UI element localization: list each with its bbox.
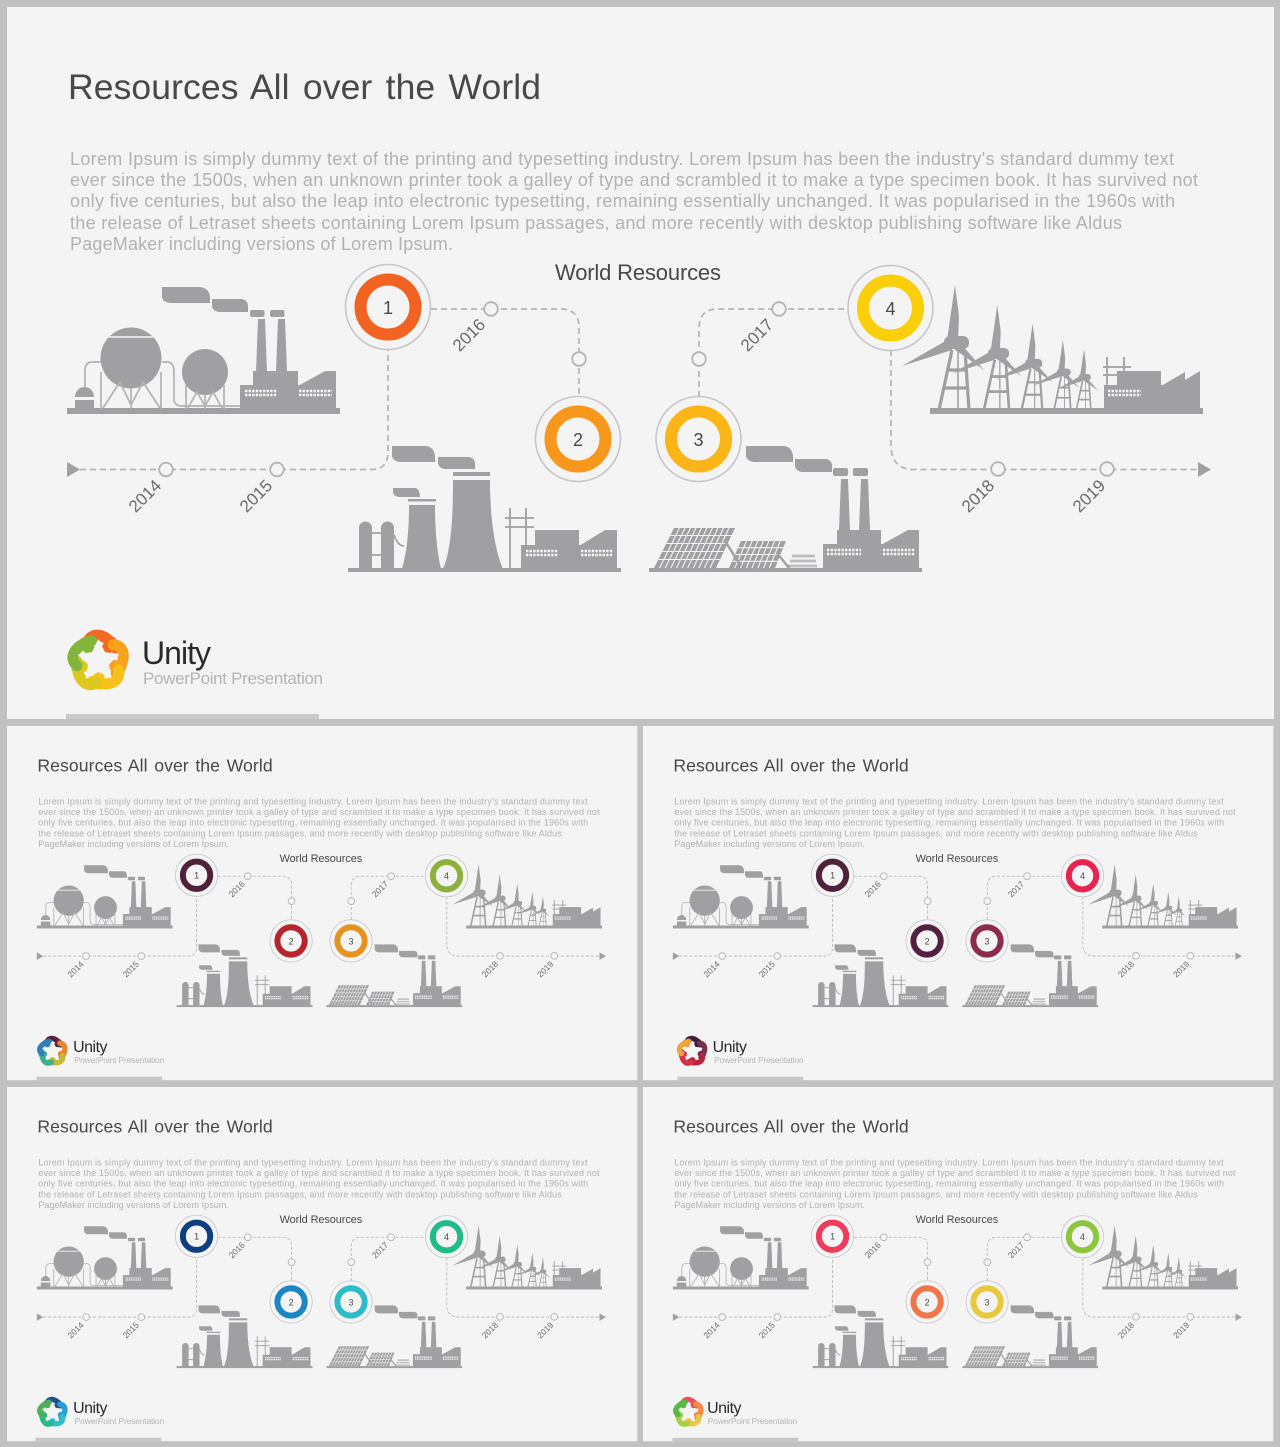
badge 2: 2 — [573, 430, 583, 450]
panel: variant slide 4 — [643, 1087, 1273, 1441]
year labels: 2019 — [535, 959, 556, 979]
year labels — [125, 315, 1109, 516]
year labels: 2017 — [1006, 879, 1026, 899]
year labels: 2016 — [227, 879, 247, 899]
badge 3: 3 — [985, 936, 990, 946]
badge 2: 2 — [289, 1297, 294, 1307]
body text — [674, 797, 1236, 849]
body text: the release of Letraset sheets containing Lorem Ipsum passages, and more recently with desktop publishing software like Aldus — [674, 1189, 1198, 1199]
icon: solar power plant — [645, 446, 922, 572]
panel: variant slide 2 — [643, 726, 1273, 1080]
title: Resources All over the World — [37, 1116, 273, 1136]
badge 1 — [811, 1215, 854, 1257]
badge 2 — [270, 920, 312, 962]
year labels: 2018 — [1116, 959, 1136, 979]
year labels: 2014 — [701, 959, 722, 979]
timeline — [67, 302, 1211, 477]
chart heading: World Resources — [916, 853, 999, 865]
year labels: 2018 — [1116, 1320, 1136, 1340]
logo icon — [674, 1399, 703, 1428]
chart heading: World Resources — [916, 1214, 999, 1226]
badge 4: 4 — [1080, 871, 1085, 881]
timeline — [673, 1234, 1242, 1321]
year labels: 2018 — [480, 959, 500, 979]
logo text — [142, 635, 323, 688]
logo text — [73, 1400, 165, 1426]
badge 2: 2 — [289, 936, 294, 946]
icon: wind farm — [902, 285, 1203, 414]
year labels: 2015 — [121, 959, 141, 979]
badge 3: 3 — [349, 1297, 354, 1307]
badge 2 — [906, 1281, 948, 1323]
year labels: 2018 — [480, 1320, 500, 1340]
year labels: 2014 — [65, 1320, 86, 1340]
logo text: PowerPoint Presentation — [75, 1055, 165, 1065]
badge 4 — [425, 855, 468, 897]
badge 4: 4 — [444, 871, 449, 881]
badge 4 — [425, 1216, 468, 1258]
chart heading: World Resources — [280, 1214, 363, 1226]
year labels: 2014 — [125, 476, 165, 516]
year labels: 2019 — [1171, 1320, 1192, 1340]
logo text: PowerPoint Presentation — [75, 1416, 165, 1426]
year labels — [701, 879, 1192, 979]
body text: only five centuries, but also the leap into electronic typesetting, remaining essentially unchanged. It was popularised in the 1960s with — [38, 818, 588, 828]
badge 1: 1 — [194, 1232, 199, 1242]
badge 2: 2 — [925, 1297, 930, 1307]
title: Resources All over the World — [37, 755, 273, 775]
year labels: 2015 — [121, 1320, 141, 1340]
factory icons — [673, 864, 1238, 1007]
year labels: 2014 — [701, 1320, 722, 1340]
body text: PageMaker including versions of Lorem Ipsum. — [70, 234, 453, 254]
badge 3: 3 — [693, 430, 704, 450]
badge 4: 4 — [1080, 1232, 1085, 1242]
title: Resources All over the World — [68, 67, 541, 107]
logo icon — [38, 1038, 67, 1067]
badge 4: 4 — [885, 299, 896, 319]
logo text — [713, 1039, 804, 1065]
icon: nuclear power plant — [348, 446, 621, 572]
body text — [38, 797, 600, 849]
body text: ever since the 1500s, when an unknown printer took a galley of type and scrambled it to make a type specimen book. It has survived not — [674, 1168, 1236, 1178]
body text — [70, 149, 1198, 254]
year labels: 2016 — [863, 1240, 883, 1260]
year labels: 2019 — [1171, 959, 1192, 979]
badge 1: 1 — [383, 298, 393, 318]
logo text: PowerPoint Presentation — [143, 669, 323, 688]
logo text: Unity — [73, 1400, 108, 1417]
timeline — [37, 1234, 606, 1321]
badge 4 — [848, 266, 933, 350]
body text: PageMaker including versions of Lorem Ipsum. — [38, 1200, 229, 1210]
badge 1 — [175, 854, 218, 896]
logo text: Unity — [713, 1039, 747, 1056]
body text: PageMaker including versions of Lorem Ipsum. — [38, 839, 229, 849]
logo icon — [70, 635, 128, 692]
logo text: PowerPoint Presentation — [714, 1055, 804, 1065]
body text: Lorem Ipsum is simply dummy text of the printing and typesetting industry. Lorem Ipsum has been the industry's standard dummy text — [674, 797, 1224, 807]
footer bar — [677, 1077, 803, 1080]
body text — [38, 1158, 600, 1210]
year labels: 2016 — [863, 879, 883, 899]
badge 3 — [966, 1281, 1008, 1323]
badge 1: 1 — [194, 871, 199, 881]
body text: ever since the 1500s, when an unknown printer took a galley of type and scrambled it to make a type specimen book. It has survived not — [38, 1168, 600, 1178]
logo text: PowerPoint Presentation — [708, 1416, 798, 1426]
body text: the release of Letraset sheets containing Lorem Ipsum passages, and more recently with desktop publishing software like Aldus — [674, 828, 1198, 838]
logo text — [707, 1400, 798, 1426]
year labels: 2019 — [1069, 476, 1109, 516]
title: Resources All over the World — [673, 1116, 909, 1136]
badge 3: 3 — [985, 1297, 990, 1307]
year labels — [701, 1240, 1192, 1340]
badge 3 — [656, 396, 741, 482]
footer bar — [66, 714, 319, 719]
body text: only five centuries, but also the leap into electronic typesetting, remaining essentially unchanged. It was popularised in the 1960s with — [674, 1178, 1224, 1188]
badge 3 — [966, 920, 1008, 962]
year labels: 2016 — [227, 1240, 247, 1260]
body text: only five centuries, but also the leap into electronic typesetting, remaining essentially unchanged. It was popularised in the 1960s with — [70, 191, 1175, 211]
chart heading: World Resources — [555, 260, 721, 285]
panel: main slide — [7, 7, 1274, 719]
year labels — [65, 1240, 556, 1340]
body text: Lorem Ipsum is simply dummy text of the printing and typesetting industry. Lorem Ipsum has been the industry's standard dummy text — [38, 1158, 588, 1168]
timeline — [673, 873, 1242, 960]
factory icons — [37, 864, 602, 1007]
year labels: 2015 — [236, 476, 276, 516]
year labels: 2015 — [757, 959, 777, 979]
badge 2 — [270, 1281, 312, 1323]
title: Resources All over the World — [673, 755, 909, 775]
badge 3 — [330, 920, 372, 962]
logo text — [73, 1039, 165, 1065]
year labels: 2018 — [958, 476, 998, 516]
body text: only five centuries, but also the leap into electronic typesetting, remaining essentially unchanged. It was popularised in the 1960s with — [674, 818, 1224, 828]
logo text: Unity — [142, 635, 211, 671]
logo icon — [678, 1038, 707, 1067]
badge 3: 3 — [349, 936, 354, 946]
chart heading: World Resources — [280, 853, 363, 865]
footer bar — [672, 1438, 798, 1441]
year labels — [65, 879, 556, 979]
badge 2: 2 — [925, 936, 930, 946]
body text: the release of Letraset sheets containing Lorem Ipsum passages, and more recently with desktop publishing software like Aldus — [70, 213, 1122, 233]
year labels: 2014 — [65, 959, 86, 979]
logo text: Unity — [707, 1400, 742, 1417]
footer bar — [36, 1077, 162, 1080]
year labels: 2017 — [370, 879, 390, 899]
body text: ever since the 1500s, when an unknown printer took a galley of type and scrambled it to make a type specimen book. It has survived not — [674, 807, 1236, 817]
icon: gas refinery factory — [67, 287, 340, 414]
body text: the release of Letraset sheets containing Lorem Ipsum passages, and more recently with desktop publishing software like Aldus — [38, 1189, 562, 1199]
logo icon — [38, 1399, 67, 1428]
body text: Lorem Ipsum is simply dummy text of the printing and typesetting industry. Lorem Ipsum has been the industry's standard dummy text — [70, 149, 1174, 169]
badge 2 — [536, 396, 620, 482]
badge 1 — [346, 264, 430, 350]
badge 4 — [1061, 855, 1104, 897]
body text: ever since the 1500s, when an unknown printer took a galley of type and scrambled it to make a type specimen book. It has survived not — [70, 170, 1198, 190]
body text: the release of Letraset sheets containing Lorem Ipsum passages, and more recently with desktop publishing software like Aldus — [38, 828, 562, 838]
year labels: 2015 — [757, 1320, 777, 1340]
factory icons — [37, 1225, 602, 1368]
badge 1: 1 — [830, 871, 835, 881]
year labels: 2019 — [535, 1320, 556, 1340]
badge 3 — [330, 1281, 372, 1323]
factory icons — [673, 1225, 1238, 1368]
body text — [674, 1158, 1236, 1210]
body text: PageMaker including versions of Lorem Ipsum. — [674, 839, 865, 849]
panel: variant slide 1 — [7, 726, 637, 1080]
year labels: 2017 — [737, 315, 777, 355]
badge 1: 1 — [830, 1232, 835, 1242]
body text: ever since the 1500s, when an unknown printer took a galley of type and scrambled it to make a type specimen book. It has survived not — [38, 807, 600, 817]
panel: variant slide 3 — [7, 1087, 637, 1441]
body text: Lorem Ipsum is simply dummy text of the printing and typesetting industry. Lorem Ipsum has been the industry's standard dummy text — [38, 797, 588, 807]
year labels: 2017 — [1006, 1240, 1026, 1260]
body text: PageMaker including versions of Lorem Ipsum. — [674, 1200, 865, 1210]
timeline — [37, 873, 606, 960]
badge 1 — [811, 854, 854, 896]
year labels: 2016 — [449, 315, 489, 355]
badge 1 — [175, 1215, 218, 1257]
logo text: Unity — [73, 1039, 108, 1056]
badge 4: 4 — [444, 1232, 449, 1242]
footer bar — [35, 1438, 161, 1441]
badge 2 — [906, 920, 948, 962]
body text: only five centuries, but also the leap into electronic typesetting, remaining essentially unchanged. It was popularised in the 1960s with — [38, 1178, 588, 1188]
badge 4 — [1061, 1216, 1104, 1258]
body text: Lorem Ipsum is simply dummy text of the printing and typesetting industry. Lorem Ipsum has been the industry's standard dummy text — [674, 1158, 1224, 1168]
year labels: 2017 — [370, 1240, 390, 1260]
